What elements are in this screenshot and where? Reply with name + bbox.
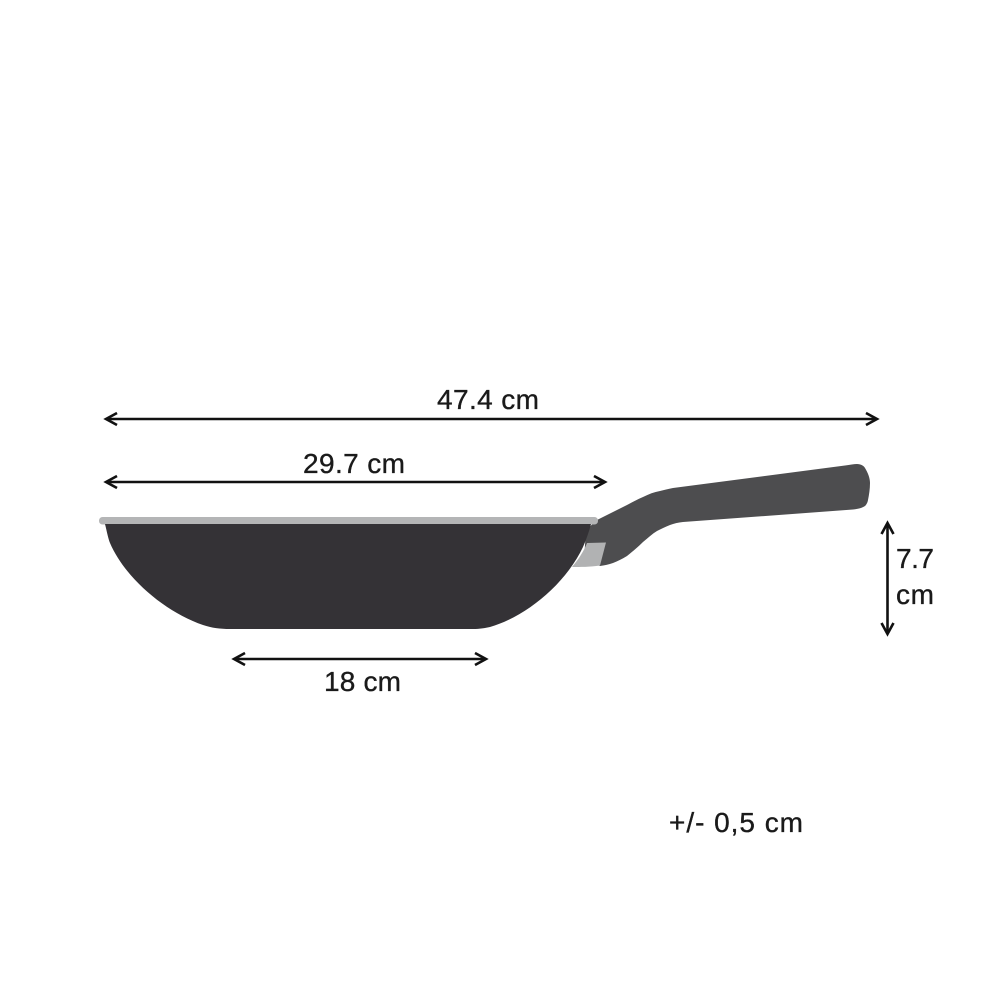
- label: height: cm: [896, 579, 934, 610]
- pan illustration: [99, 464, 870, 629]
- pan rim: [99, 517, 598, 524]
- silver handle bracket: [572, 542, 606, 567]
- label: base diameter: 18 cm: [324, 666, 401, 697]
- arrow: overall length: [106, 413, 877, 425]
- label: height: 7.7: [896, 543, 934, 574]
- label: pan top diameter: 29.7 cm: [303, 448, 405, 479]
- pan body: [105, 524, 591, 629]
- arrow: base diameter: [234, 653, 486, 665]
- label: overall length: 47.4 cm: [437, 384, 539, 415]
- pan handle: [584, 464, 870, 566]
- arrow: height: [882, 523, 894, 634]
- arrow: pan top diameter: [106, 476, 605, 488]
- label: height: [896, 543, 934, 610]
- tolerance note: +/- 0,5 cm: [669, 807, 803, 838]
